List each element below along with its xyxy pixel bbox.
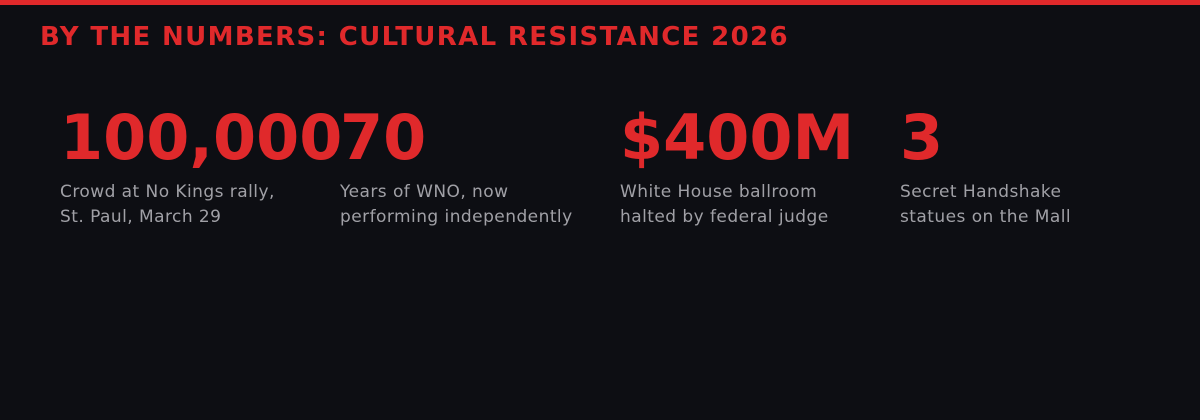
caption: statues bbox=[900, 182, 1071, 227]
caption: ballroom: halted by federal judge bbox=[620, 207, 829, 227]
stat: statues bbox=[900, 101, 1071, 227]
number: 3: 3 bbox=[900, 101, 943, 174]
caption: ballroom: White House ballroom bbox=[620, 182, 817, 202]
stat: WNO years bbox=[340, 101, 573, 227]
number: 100,000: 100,000 bbox=[60, 101, 342, 174]
caption: crowd: St. Paul, March 29 bbox=[60, 207, 221, 227]
caption: WNO: performing independently bbox=[340, 207, 573, 227]
caption: statues: statues on the Mall bbox=[900, 207, 1071, 227]
caption: statues: Secret Handshake bbox=[900, 182, 1061, 202]
title: BY THE NUMBERS: CULTURAL RESISTANCE 2026 bbox=[40, 22, 789, 52]
number: 70: 70 bbox=[340, 101, 426, 174]
caption: crowd bbox=[60, 182, 275, 227]
number: $400M: $400M bbox=[620, 101, 854, 174]
caption: crowd: Crowd at No Kings rally, bbox=[60, 182, 275, 202]
stat: crowd bbox=[60, 101, 342, 227]
caption: WNO: Years of WNO, now bbox=[340, 182, 508, 202]
stat: ballroom bbox=[620, 101, 854, 227]
caption: ballroom bbox=[620, 182, 829, 227]
caption: WNO bbox=[340, 182, 573, 227]
